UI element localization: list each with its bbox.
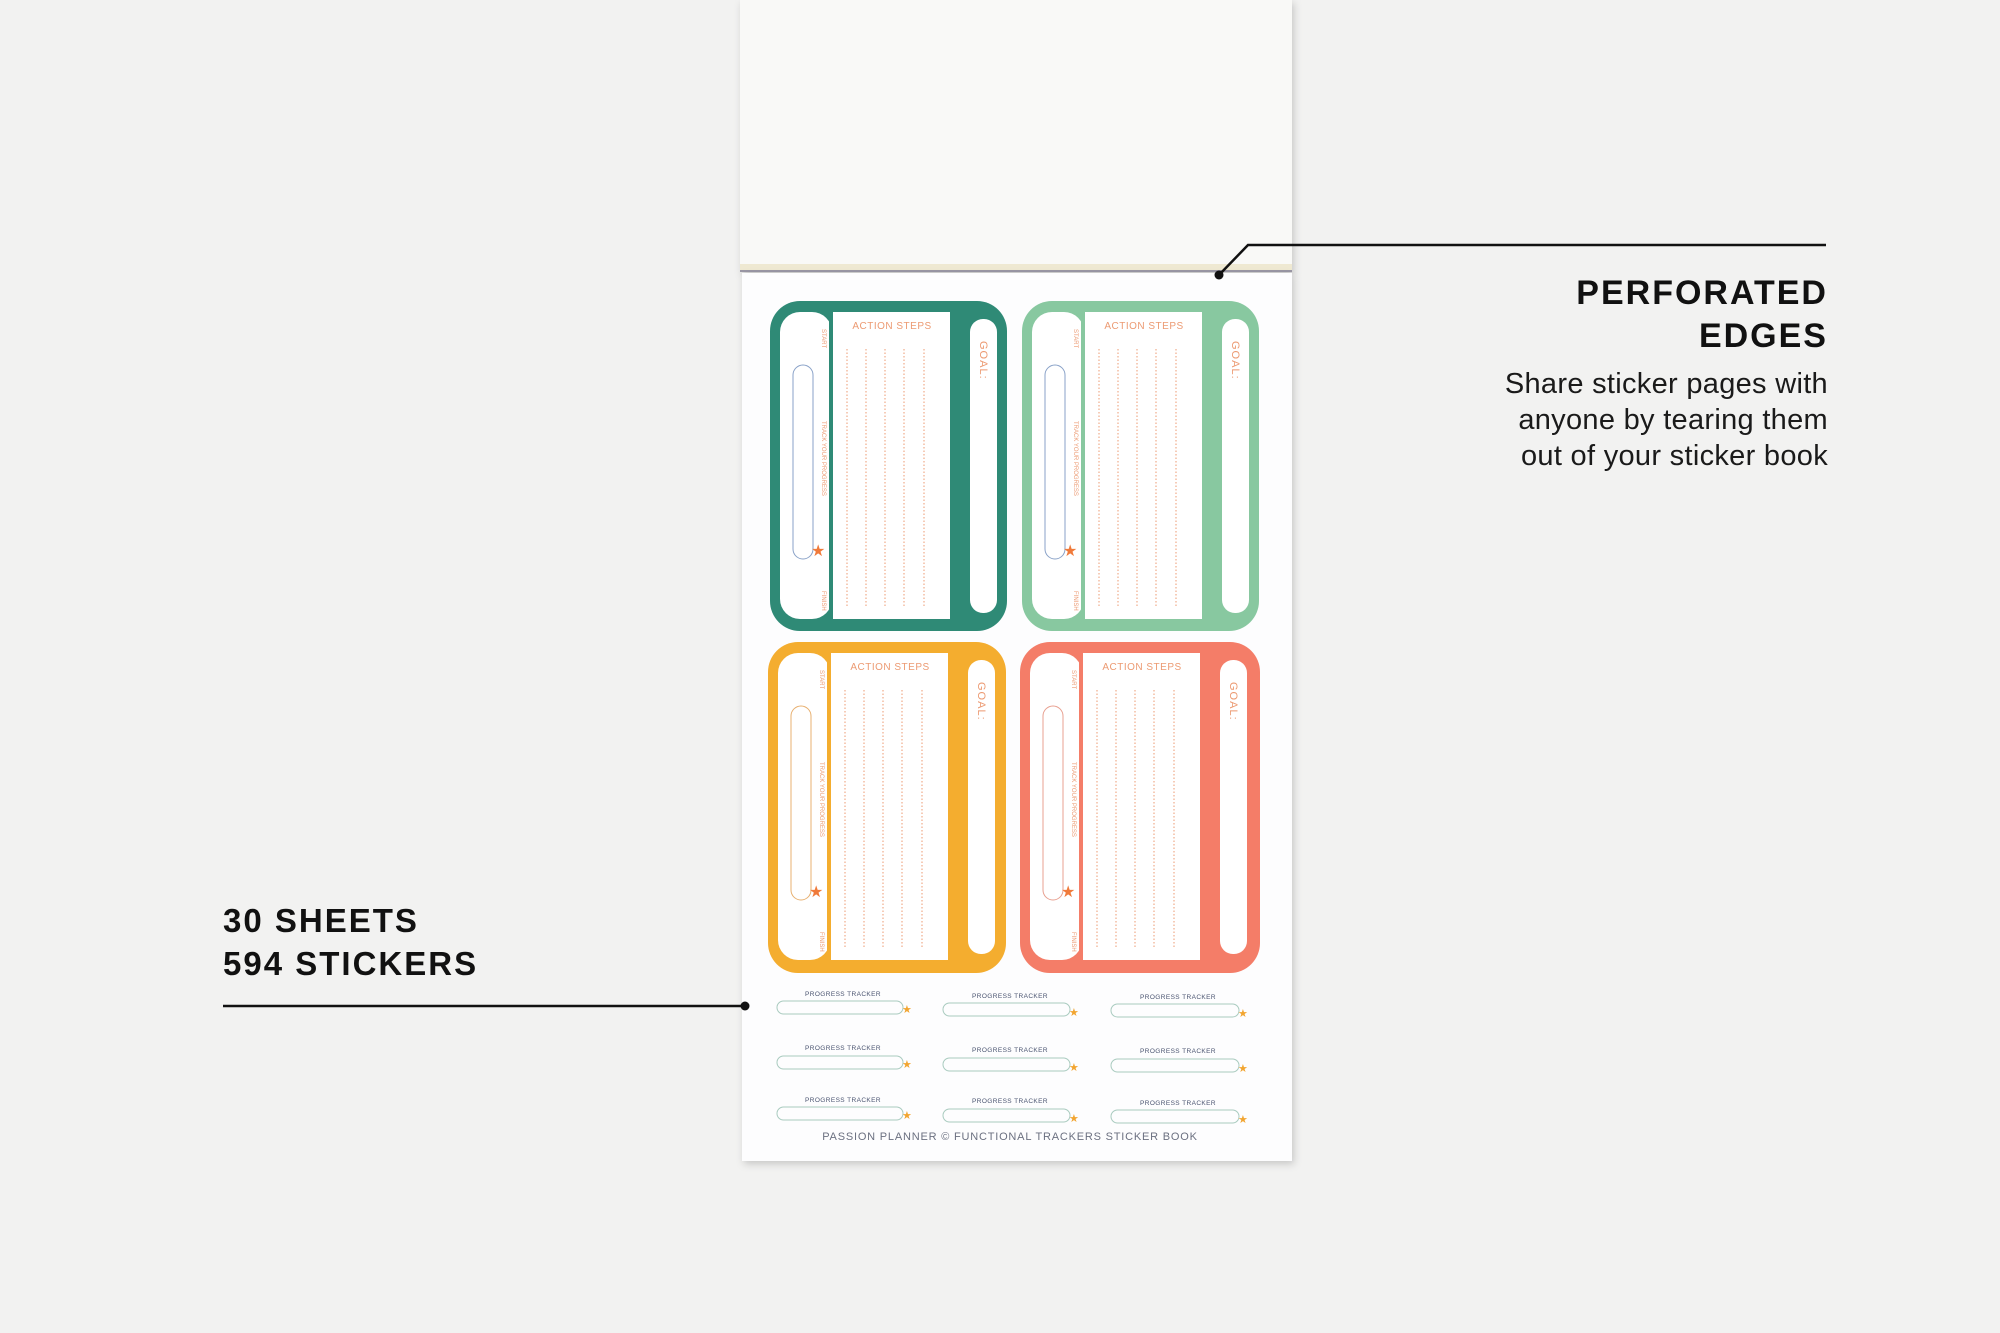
sticker sheet page: ★ <box>1069 1007 1079 1019</box>
sticker sheet page: ★ <box>1238 1114 1248 1126</box>
progress tracker stickers: PROGRESS TRACKER <box>972 1047 1048 1054</box>
card: teal: FINISH <box>820 591 826 611</box>
card: green: START <box>1072 329 1078 348</box>
sticker sheet page: ★ <box>1238 1063 1248 1075</box>
card: orange: TRACK YOUR PROGRESS <box>818 762 824 837</box>
card: teal: GOAL: <box>977 341 989 380</box>
progress tracker stickers: PROGRESS TRACKER <box>1140 1100 1216 1107</box>
card: coral <box>1020 642 1260 973</box>
callout body text <box>1505 368 1828 472</box>
card: orange <box>768 642 1006 973</box>
card: orange: ACTION STEPS <box>850 662 930 673</box>
card: orange: FINISH <box>818 932 824 952</box>
callout heading: perforated edges: PERFORATED <box>1576 274 1828 312</box>
card: teal: ACTION STEPS <box>852 321 932 332</box>
progress tracker stickers: PROGRESS TRACKER <box>972 1098 1048 1105</box>
callout heading: sheets and stickers: 30 SHEETS <box>223 902 419 939</box>
sticker sheet page: ★ <box>902 1110 912 1122</box>
card: teal: ★ <box>811 543 825 560</box>
card: green: ★ <box>1063 543 1077 560</box>
progress tracker stickers: PROGRESS TRACKER <box>1140 994 1216 1001</box>
card: green: FINISH <box>1072 591 1078 611</box>
card: green: TRACK YOUR PROGRESS <box>1072 421 1078 496</box>
callout heading: sheets and stickers: 594 STICKERS <box>223 945 478 982</box>
card: teal: START <box>820 329 826 348</box>
card: orange: START <box>818 670 824 689</box>
top page (torn back) <box>740 0 1292 272</box>
card: orange: GOAL: <box>975 682 987 721</box>
progress tracker stickers: PROGRESS TRACKER <box>805 1097 881 1104</box>
progress tracker stickers: PROGRESS TRACKER <box>1140 1048 1216 1055</box>
sticker sheet page <box>742 273 1292 1161</box>
sticker sheet page: ★ <box>1069 1113 1079 1125</box>
card: orange: ★ <box>809 884 823 901</box>
progress tracker stickers: PROGRESS TRACKER <box>805 1045 881 1052</box>
card: coral: START <box>1070 670 1076 689</box>
sticker sheet page: ★ <box>1238 1008 1248 1020</box>
card: coral: TRACK YOUR PROGRESS <box>1070 762 1076 837</box>
card: coral: FINISH <box>1070 932 1076 952</box>
card: green: GOAL: <box>1229 341 1241 380</box>
sticker sheet page: ★ <box>1069 1062 1079 1074</box>
card: coral: GOAL: <box>1227 682 1239 721</box>
card: green: ACTION STEPS <box>1104 321 1184 332</box>
callout body text: anyone by tearing them <box>1518 404 1828 436</box>
progress tracker stickers: PROGRESS TRACKER <box>972 993 1048 1000</box>
callout body text: out of your sticker book <box>1521 440 1828 472</box>
callout line: sheets <box>223 1002 750 1010</box>
footer text on page: PASSION PLANNER © FUNCTIONAL TRACKERS STICKER BOOK <box>822 1131 1198 1143</box>
progress tracker stickers <box>805 991 1216 1107</box>
callout heading: sheets and stickers <box>223 902 478 982</box>
card: green <box>1022 301 1259 631</box>
sticker sheet page: ★ <box>902 1059 912 1071</box>
sticker sheet page: ★ <box>902 1004 912 1016</box>
progress tracker stickers: PROGRESS TRACKER <box>805 991 881 998</box>
card: coral: ★ <box>1061 884 1075 901</box>
callout body text: Share sticker pages with <box>1505 368 1828 400</box>
callout line: perforated edges <box>1214 245 1826 280</box>
callout heading: perforated edges: EDGES <box>1699 317 1828 355</box>
card: coral: ACTION STEPS <box>1102 662 1182 673</box>
callout heading: perforated edges <box>1576 274 1828 355</box>
card: teal: TRACK YOUR PROGRESS <box>820 421 826 496</box>
card: teal <box>770 301 1007 631</box>
